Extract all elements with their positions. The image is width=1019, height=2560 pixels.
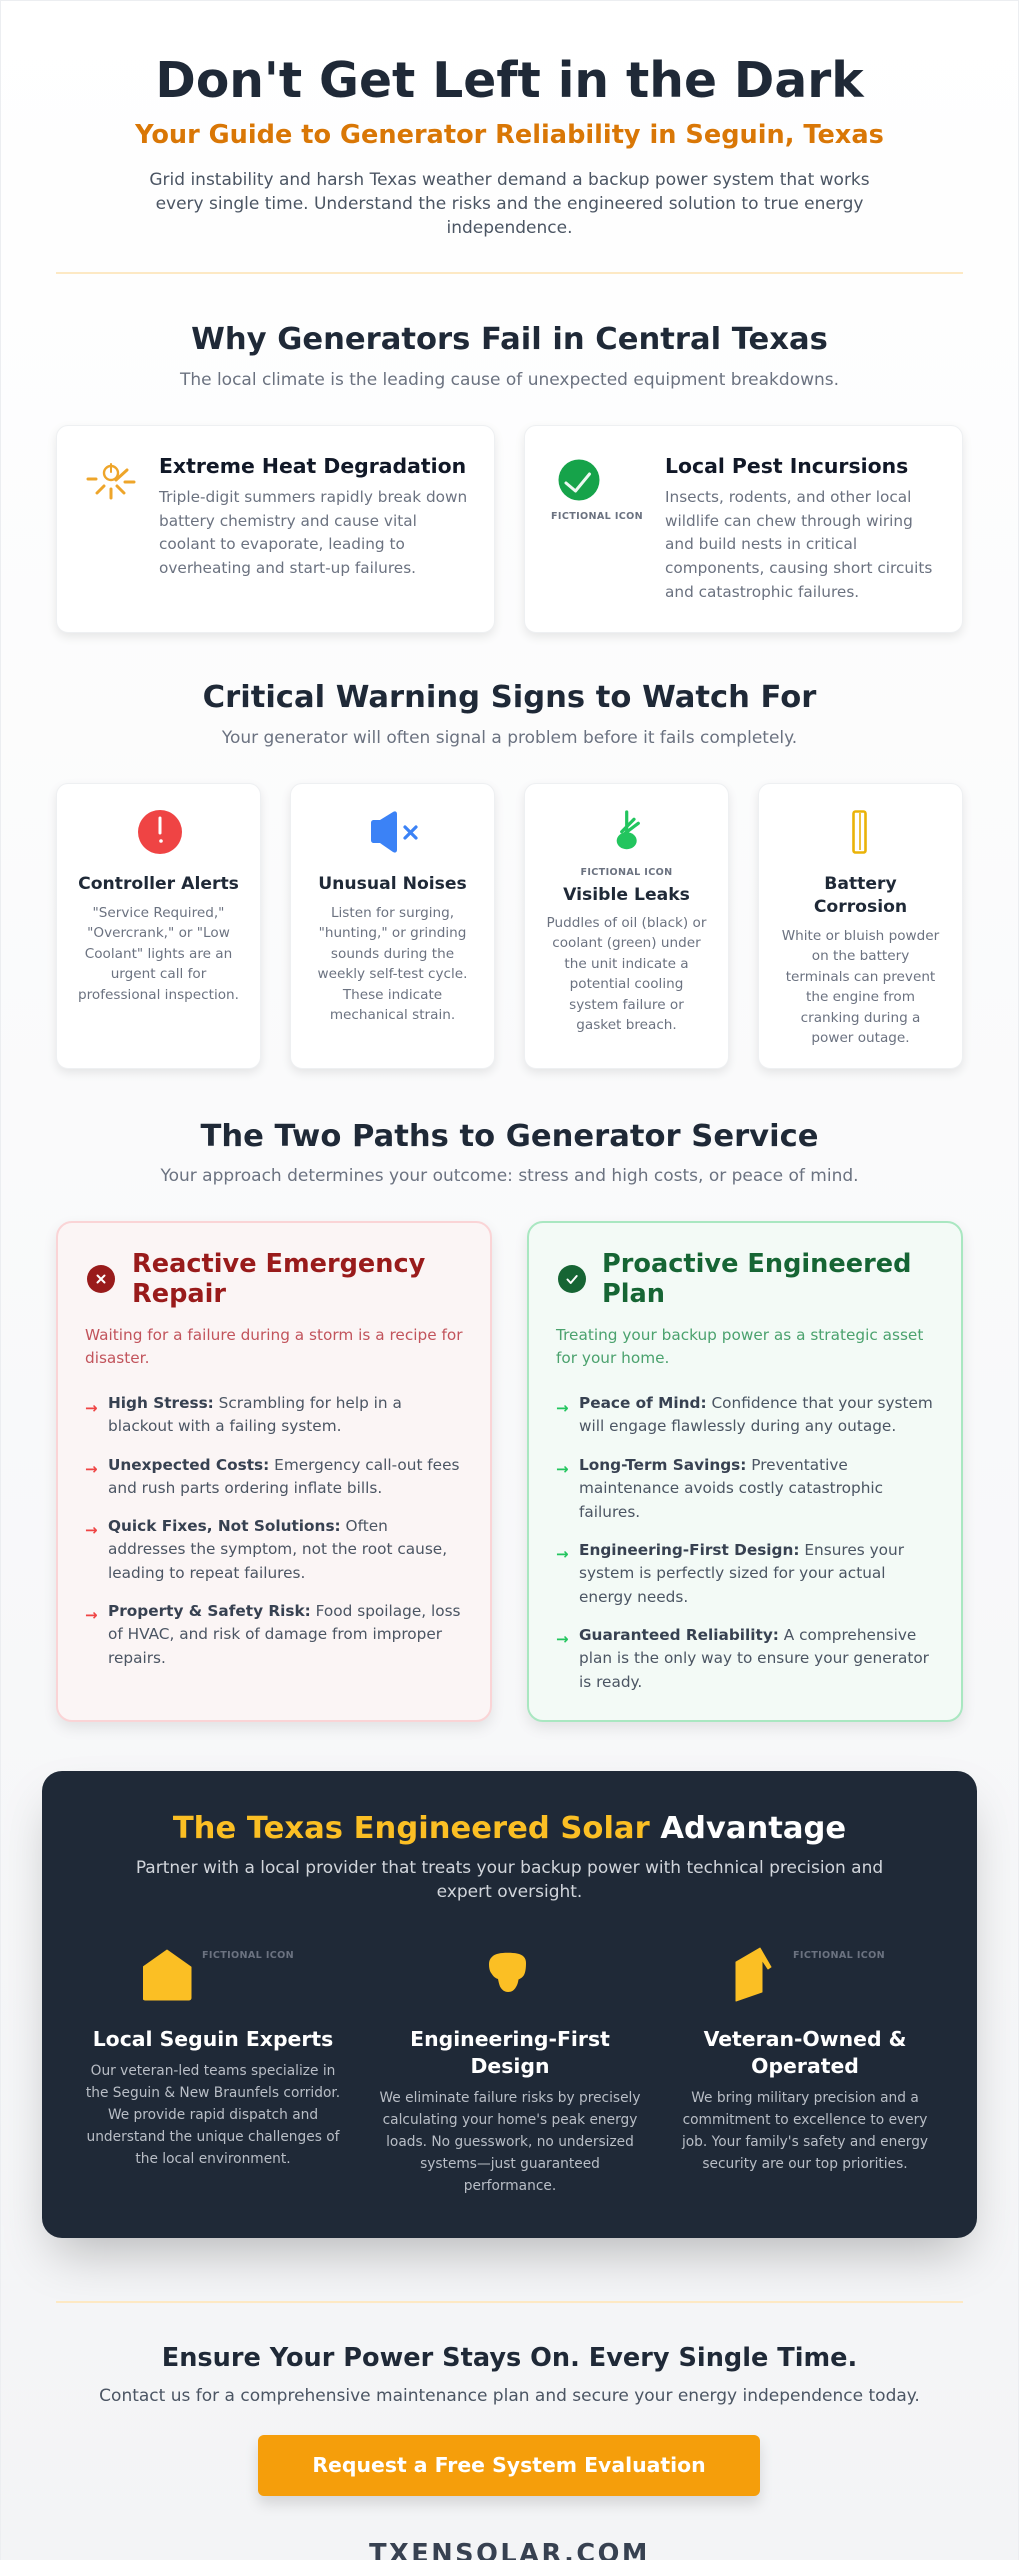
- card text: components, causing short circuits: [665, 559, 932, 577]
- icon: speaker: [371, 811, 418, 853]
- card text: terminals can prevent: [786, 969, 935, 985]
- card text: "Overcrank," or "Low: [87, 925, 230, 941]
- panel: unusual noises: [290, 783, 495, 1069]
- item: design: energy needs.: [579, 1588, 688, 1606]
- card text: the engine from: [806, 989, 915, 1005]
- column text: performance.: [464, 2178, 556, 2194]
- column text: the local environment.: [135, 2151, 291, 2167]
- icon: check circle: [558, 460, 600, 500]
- card text: [158, 488, 467, 577]
- column title: [645, 2026, 965, 2080]
- panel heading: [132, 1248, 425, 1309]
- heading: two paths: The Two Paths to Generator Service: [200, 1118, 818, 1154]
- panel intro: Treating your backup power as a strategic asset: [556, 1326, 923, 1344]
- icon: house: [143, 1950, 192, 2000]
- item: savings: maintenance avoids costly catastrophic: [579, 1479, 883, 1497]
- card title: Local Pest Incursions: [665, 454, 908, 478]
- card text: power outage.: [811, 1030, 910, 1046]
- item: high stress: High Stress: Scrambling for help in a: [108, 1394, 402, 1412]
- item: peace of mind: will engage flawlessly during any outage.: [579, 1417, 896, 1435]
- list: →: [85, 1460, 98, 1478]
- subtitle: Your Guide to Generator Reliability in Seguin, Texas: [135, 120, 884, 150]
- card text: [665, 488, 932, 601]
- list: →: [85, 1606, 98, 1624]
- intro text: [149, 170, 870, 238]
- card text: gasket breach.: [576, 1017, 677, 1033]
- panel intro: for your home.: [556, 1349, 669, 1367]
- card text: potential cooling: [570, 976, 683, 992]
- card text: sounds during the: [331, 946, 454, 962]
- button: [258, 2435, 760, 2496]
- column text: We provide rapid dispatch and: [108, 2107, 318, 2123]
- card text: battery chemistry and cause vital: [159, 512, 417, 530]
- item: property: Property & Safety Risk: Food spoilage, loss: [108, 1602, 461, 1620]
- card title: Corrosion: [814, 897, 907, 917]
- icon caption: FICTIONAL ICON: [580, 867, 673, 878]
- icon: battery: [852, 810, 867, 854]
- intro text: independence.: [446, 218, 572, 238]
- item: property: of HVAC, and risk of damage from improper: [108, 1625, 442, 1643]
- panel: extreme heat: [56, 425, 495, 633]
- title: Don't Get Left in the Dark: [155, 53, 864, 109]
- item: reliability: is ready.: [579, 1673, 642, 1691]
- item: costs: [108, 1456, 459, 1497]
- intro text: every single time. Understand the risks and the engineered solution to true energy: [156, 194, 863, 214]
- item: savings: Long-Term Savings: Preventative: [579, 1456, 848, 1474]
- panel heading: Plan: [602, 1279, 665, 1309]
- heading: warning signs: Critical Warning Signs to Watch For: [203, 680, 816, 715]
- panel heading: [602, 1248, 911, 1309]
- item: costs: and rush parts ordering inflate bills.: [108, 1479, 382, 1497]
- column text: security are our top priorities.: [702, 2156, 908, 2172]
- advantage intro: Partner with a local provider that treats your backup power with technical precision and: [136, 1858, 883, 1878]
- item: savings: [579, 1456, 883, 1521]
- column text: We eliminate failure risks by precisely: [380, 2090, 640, 2106]
- column text: calculating your home's peak energy: [383, 2112, 637, 2128]
- card text: White or bluish powder: [782, 928, 939, 944]
- column text: Our veteran-led teams specialize in: [91, 2063, 335, 2079]
- card title: Battery: [824, 874, 897, 894]
- card text: Puddles of oil (black) or: [547, 915, 706, 931]
- item: peace of mind: [579, 1394, 933, 1435]
- card title: Extreme Heat Degradation: [159, 454, 466, 478]
- column: veteran owned: [645, 2026, 965, 2216]
- card text: the unit indicate a: [564, 956, 689, 972]
- card title: Controller Alerts: [78, 874, 239, 894]
- panel intro: disaster.: [85, 1349, 149, 1367]
- column title: Veteran-Owned &: [704, 2027, 906, 2051]
- panel intro: Waiting for a failure during a storm is a recipe for: [85, 1326, 463, 1344]
- card text: "Service Required,": [93, 905, 224, 921]
- card title: Visible Leaks: [563, 884, 690, 904]
- card text: mechanical strain.: [330, 1007, 455, 1023]
- card title: Unusual Noises: [318, 874, 467, 894]
- list: →: [556, 1399, 569, 1417]
- item: high stress: blackout with a failing system.: [108, 1417, 341, 1435]
- icon: x circle: [87, 1265, 115, 1293]
- column text: loads. No guesswork, no undersized: [386, 2134, 634, 2150]
- column title: Local Seguin Experts: [93, 2027, 333, 2051]
- list: →: [556, 1460, 569, 1478]
- card text: wildlife can chew through wiring: [665, 512, 913, 530]
- panel heading: Reactive Emergency: [132, 1248, 425, 1278]
- list: →: [85, 1399, 98, 1417]
- panel: reactive: [56, 1221, 492, 1722]
- item: high stress: [108, 1394, 402, 1435]
- card text: [547, 915, 706, 1033]
- card text: and catastrophic failures.: [665, 583, 859, 601]
- list: →: [85, 1521, 98, 1539]
- item: design: system is perfectly sized for your actual: [579, 1564, 886, 1582]
- icon: check circle: [558, 1265, 586, 1293]
- item: savings: failures.: [579, 1503, 640, 1521]
- item: reliability: Guaranteed Reliability: A comprehensive: [579, 1626, 916, 1644]
- column title: Engineering-First: [410, 2027, 610, 2051]
- icon: leak: [616, 810, 640, 850]
- button: Request a Free System Evaluation: [312, 2453, 706, 2477]
- icon: flag shape: [736, 1948, 772, 2002]
- column title: Operated: [751, 2054, 859, 2078]
- icon: alert: [138, 810, 182, 854]
- list: →: [556, 1545, 569, 1563]
- card title: [814, 874, 907, 917]
- item: reliability: plan is the only way to ensure your generator: [579, 1649, 929, 1667]
- icon caption: FICTIONAL ICON: [793, 1950, 885, 1961]
- card text: and build nests in critical: [665, 535, 857, 553]
- advantage heading: The Texas Engineered Solar Advantage: [173, 1810, 846, 1846]
- column text: job. Your family's safety and energy: [682, 2134, 928, 2150]
- panel: advantage: [42, 1771, 977, 2238]
- card text: These indicate: [343, 987, 442, 1003]
- panel: local pests: [524, 425, 963, 633]
- card text: Coolant" lights are an: [85, 946, 232, 962]
- panel: visible leaks: [524, 783, 729, 1069]
- closing heading: Ensure Your Power Stays On. Every Single Time.: [162, 2343, 857, 2373]
- icon: sun: [86, 463, 136, 500]
- list: [556, 1394, 933, 1691]
- column: local experts: [86, 2027, 340, 2167]
- panel heading: Proactive Engineered: [602, 1248, 911, 1278]
- panel: controller alerts: [56, 783, 261, 1069]
- column text: [380, 2090, 640, 2194]
- card text: "hunting," or grinding: [319, 925, 466, 941]
- card text: urgent call for: [111, 966, 206, 982]
- item: reliability: [579, 1626, 929, 1691]
- section subheading: Your approach determines your outcome: stress and high costs, or peace of mind.: [160, 1166, 859, 1186]
- item: design: [579, 1540, 904, 1606]
- list: [85, 1394, 461, 1667]
- item: quick fixes: leading to repeat failures.: [108, 1564, 305, 1582]
- advantage intro: [136, 1858, 883, 1902]
- card text: [78, 905, 239, 1003]
- card text: coolant (green) under: [552, 935, 701, 951]
- card text: on the battery: [812, 948, 909, 964]
- item: property: repairs.: [108, 1649, 166, 1667]
- item: costs: Unexpected Costs: Emergency call-out fees: [108, 1456, 459, 1474]
- card text: [318, 905, 467, 1023]
- heading: why generators fail: Why Generators Fail in Central Texas: [191, 322, 828, 356]
- card text: coolant to evaporate, leading to: [159, 535, 405, 553]
- column title: Design: [470, 2054, 550, 2078]
- item: property: [108, 1602, 461, 1667]
- panel heading: Repair: [132, 1279, 226, 1309]
- card text: [782, 928, 940, 1046]
- closing text: Contact us for a comprehensive maintenance plan and secure your energy independence today.: [99, 2386, 920, 2406]
- card text: system failure or: [569, 997, 684, 1013]
- panel: proactive: [527, 1221, 963, 1722]
- icon: bulb: [489, 1952, 526, 1992]
- card text: professional inspection.: [78, 987, 239, 1003]
- column text: commitment to excellence to every: [683, 2112, 927, 2128]
- icon caption: FICTIONAL ICON: [202, 1950, 294, 1961]
- advantage intro: expert oversight.: [437, 1882, 582, 1902]
- column text: We bring military precision and a: [691, 2090, 919, 2106]
- section subheading: The local climate is the leading cause of unexpected equipment breakdowns.: [180, 370, 839, 390]
- item: quick fixes: addresses the symptom, not the root cause,: [108, 1540, 447, 1558]
- column text: the Seguin & New Braunfels corridor.: [86, 2085, 340, 2101]
- item: design: Engineering-First Design: Ensures your: [579, 1540, 904, 1558]
- icon caption: FICTIONAL ICON: [551, 511, 643, 522]
- item: quick fixes: Quick Fixes, Not Solutions: Often: [108, 1516, 388, 1534]
- panel: battery corrosion: [758, 783, 963, 1069]
- column text: systems—just guaranteed: [420, 2156, 600, 2172]
- item: peace of mind: Peace of Mind: Confidence that your system: [579, 1394, 933, 1412]
- card text: Listen for surging,: [331, 905, 454, 921]
- column text: understand the unique challenges of: [86, 2129, 340, 2145]
- panel intro: [85, 1326, 463, 1367]
- intro text: Grid instability and harsh Texas weather demand a backup power system that works: [149, 170, 870, 190]
- item: quick fixes: [108, 1516, 447, 1582]
- card text: weekly self-test cycle.: [318, 966, 467, 982]
- column: engineering first: [380, 2027, 640, 2194]
- panel intro: [556, 1326, 923, 1367]
- column text: [645, 2087, 965, 2175]
- list: →: [556, 1630, 569, 1648]
- card text: Triple-digit summers rapidly break down: [159, 488, 467, 506]
- card text: cranking during a: [801, 1010, 920, 1026]
- card text: overheating and start-up failures.: [159, 559, 416, 577]
- card text: Insects, rodents, and other local: [665, 488, 911, 506]
- section subheading: Your generator will often signal a problem before it fails completely.: [222, 728, 797, 748]
- column title: [410, 2027, 610, 2078]
- column text: [86, 2063, 340, 2167]
